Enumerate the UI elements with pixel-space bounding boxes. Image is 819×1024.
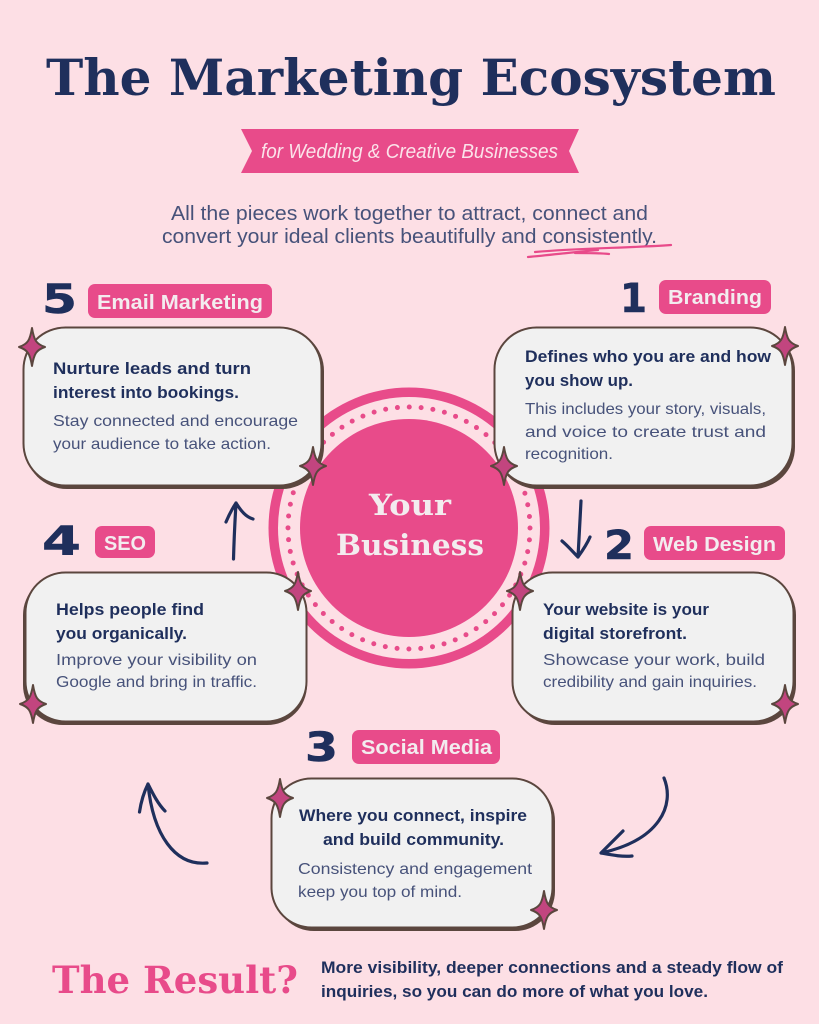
card: seo: Improve your visibility on bbox=[56, 652, 257, 669]
arrow: 2 to 3 bbox=[601, 778, 667, 856]
card: web design bbox=[512, 572, 796, 725]
number 3: 3 bbox=[305, 725, 338, 771]
card: branding: you show up. bbox=[525, 372, 633, 390]
card: branding: recognition. bbox=[525, 446, 613, 463]
step 5: email marketing bbox=[19, 277, 326, 489]
card: branding: Defines who you are and how bbox=[525, 348, 771, 366]
card: social media bbox=[272, 778, 555, 931]
step 2: web design bbox=[507, 523, 798, 725]
result text: inquiries, so you can do more of what you love. bbox=[321, 983, 708, 1001]
sparkles bbox=[507, 572, 798, 723]
center circle: your business bbox=[268, 388, 550, 668]
card: email marketing: interest into bookings. bbox=[53, 384, 239, 402]
card: web design: digital storefront. bbox=[543, 625, 687, 643]
number 1: 1 bbox=[620, 276, 647, 322]
tag: social media bbox=[352, 730, 500, 764]
card: web design: Your website is your bbox=[543, 601, 710, 619]
result text: More visibility, deeper connections and a steady flow of bbox=[321, 959, 784, 977]
arrow: 1 to 2 bbox=[562, 501, 590, 557]
card: email marketing: your audience to take action. bbox=[53, 436, 271, 453]
card: web design: credibility and gain inquiries. bbox=[543, 674, 757, 691]
arrow: 3 to 4 bbox=[140, 784, 207, 863]
intro text: convert your ideal clients beautifully and consistently. bbox=[162, 226, 657, 248]
title: The Marketing Ecosystem bbox=[46, 48, 776, 107]
intro text: All the pieces work together to attract, connect and bbox=[171, 203, 648, 225]
tag: seo: SEO bbox=[104, 532, 146, 555]
tag: web design bbox=[644, 526, 785, 560]
number 2: 2 bbox=[604, 523, 634, 569]
tag: branding: Branding bbox=[668, 286, 762, 309]
tag: email marketing: Email Marketing bbox=[97, 291, 263, 314]
arrow: 4 to 5 bbox=[226, 503, 253, 559]
card: branding: This includes your story, visuals, bbox=[525, 401, 766, 418]
card: social media: Consistency and engagement bbox=[298, 861, 533, 878]
sparkles bbox=[20, 572, 311, 723]
card: social media: Where you connect, inspire bbox=[299, 807, 527, 825]
result text bbox=[321, 959, 784, 1001]
card: seo: Helps people find bbox=[56, 601, 204, 619]
intro text bbox=[162, 203, 657, 248]
tag: email marketing bbox=[88, 284, 272, 318]
center circle: your business: Your bbox=[368, 488, 452, 522]
result heading: The Result? bbox=[52, 958, 298, 1002]
center circle: your business: Business bbox=[336, 528, 484, 562]
card: social media: keep you top of mind. bbox=[298, 884, 462, 901]
card: seo: you organically. bbox=[56, 625, 187, 643]
card: branding bbox=[494, 328, 795, 489]
card: social media: and build community. bbox=[323, 831, 504, 849]
card: branding: and voice to create trust and bbox=[525, 424, 766, 441]
underline scribble bbox=[528, 245, 671, 257]
sparkles bbox=[19, 328, 326, 485]
tag: seo bbox=[95, 526, 155, 558]
subtitle ribbon bbox=[241, 129, 579, 173]
number 4: 4 bbox=[42, 519, 81, 565]
subtitle ribbon: for Wedding & Creative Businesses bbox=[261, 141, 558, 163]
tag: branding bbox=[659, 280, 771, 314]
card: email marketing: Stay connected and encourage bbox=[53, 413, 298, 430]
card: seo: Google and bring in traffic. bbox=[56, 674, 257, 691]
sparkles bbox=[491, 327, 798, 485]
card: email marketing bbox=[24, 328, 324, 489]
number 5: 5 bbox=[42, 277, 77, 323]
card: email marketing: Nurture leads and turn bbox=[53, 360, 251, 378]
step 4: seo bbox=[20, 519, 311, 725]
step 1: branding bbox=[491, 276, 798, 489]
step 3: social media bbox=[267, 725, 557, 931]
sparkles bbox=[267, 779, 557, 929]
card: seo bbox=[23, 572, 307, 725]
tag: social media: Social Media bbox=[361, 736, 493, 759]
card: web design: Showcase your work, build bbox=[543, 652, 765, 669]
tag: web design: Web Design bbox=[653, 533, 776, 556]
